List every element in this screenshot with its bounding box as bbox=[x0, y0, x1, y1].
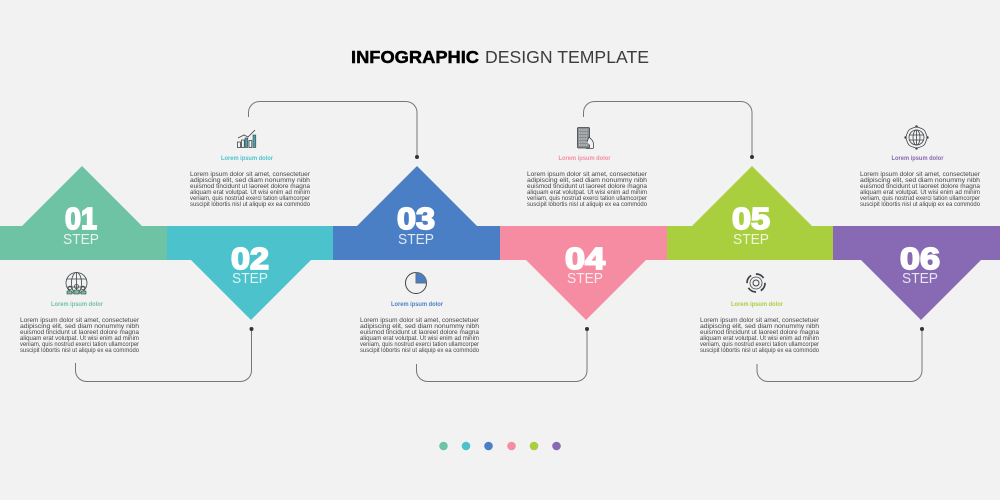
text block: step 5: adipiscing elit, sed diam nonummy nibh bbox=[700, 324, 819, 330]
panel: step 03 banner bbox=[333, 166, 500, 260]
connector: step 6 to text below step 5 bbox=[757, 327, 924, 382]
text block: step 6: suscipit lobortis nisl ut aliquip ex ea commodo bbox=[860, 202, 981, 208]
panel: step 04 banner bbox=[500, 226, 667, 320]
text block: step 6: veniam, quis nostrud exerci tation ullamcorper bbox=[860, 196, 980, 202]
title: DESIGN TEMPLATE bbox=[485, 47, 649, 67]
text block: step 1: Lorem ipsum dolor bbox=[51, 302, 104, 308]
text block: step 4: aliquam erat volutpat. Ut wisi enim ad minim bbox=[527, 190, 647, 196]
text block: step 2: Lorem ipsum dolor sit amet, consectetuer bbox=[190, 172, 310, 178]
text block: step 5: suscipit lobortis nisl ut aliquip ex ea commodo bbox=[700, 348, 820, 354]
panel: step 04 banner: 04 bbox=[565, 241, 606, 276]
text block: step 6: Lorem ipsum dolor bbox=[892, 156, 944, 162]
text block: step 5: aliquam erat volutpat. Ut wisi enim ad minim bbox=[700, 336, 819, 342]
panel: step 02 banner: 02 bbox=[231, 241, 269, 276]
text block: step 1: veniam, quis nostrud exerci tation ullamcorper bbox=[20, 342, 139, 348]
text block: step 6: adipiscing elit, sed diam nonummy nibh bbox=[860, 178, 980, 184]
text block: step 4 bbox=[527, 156, 648, 208]
icon: pie chart bbox=[406, 272, 426, 294]
panel: step 01 banner: STEP bbox=[63, 231, 99, 248]
text block: step 5 bbox=[700, 302, 820, 354]
text block: step 6: euismod tincidunt ut laoreet dolore magna bbox=[860, 184, 981, 190]
icon: global network bbox=[904, 125, 929, 150]
text block: step 2: adipiscing elit, sed diam nonummy nibh bbox=[190, 178, 310, 184]
text block: step 3: veniam, quis nostrud exerci tation ullamcorper bbox=[360, 342, 479, 348]
panel: step 06 banner: 06 bbox=[900, 241, 940, 276]
legend dots bbox=[439, 442, 561, 450]
panel: step 02 banner: STEP bbox=[232, 270, 268, 287]
text block: step 4: euismod tincidunt ut laoreet dolore magna bbox=[527, 184, 648, 190]
text block: step 1 bbox=[20, 302, 140, 354]
connector: step 3 to text above step 2 bbox=[248, 102, 419, 159]
title bbox=[351, 47, 649, 67]
text block: step 3 bbox=[360, 302, 480, 354]
panel: step 03 banner: STEP bbox=[398, 231, 434, 248]
connector: step 2 to text below step 1 bbox=[76, 327, 254, 382]
text block: step 4: Lorem ipsum dolor sit amet, consectetuer bbox=[527, 172, 647, 178]
text block: step 1: aliquam erat volutpat. Ut wisi enim ad minim bbox=[20, 336, 139, 342]
icon: gear with circular arrows bbox=[747, 274, 765, 292]
text block: step 5: veniam, quis nostrud exerci tation ullamcorper bbox=[700, 342, 819, 348]
text block: step 5: Lorem ipsum dolor bbox=[731, 302, 784, 308]
panel: step 05 banner: STEP bbox=[733, 231, 769, 248]
text block: step 4: adipiscing elit, sed diam nonummy nibh bbox=[527, 178, 647, 184]
panel: step 03 banner: 03 bbox=[397, 201, 435, 236]
panel: step 05 banner bbox=[667, 166, 833, 260]
text block: step 3: Lorem ipsum dolor sit amet, consectetuer bbox=[360, 318, 479, 324]
connector: step 5 to text above step 4 bbox=[584, 102, 754, 159]
text block: step 4: Lorem ipsum dolor bbox=[558, 156, 611, 162]
connector: step 4 to text below step 3 bbox=[416, 327, 589, 382]
text block: step 1: adipiscing elit, sed diam nonummy nibh bbox=[20, 324, 139, 330]
panel: step 06 banner: STEP bbox=[902, 270, 938, 287]
text block: step 1: Lorem ipsum dolor sit amet, consectetuer bbox=[20, 318, 139, 324]
panel: step 02 banner bbox=[167, 226, 333, 320]
panel: step 04 banner: STEP bbox=[567, 270, 603, 287]
title: INFOGRAPHIC bbox=[351, 47, 479, 67]
icon: globe with people bbox=[66, 272, 87, 294]
text block: step 1: euismod tincidunt ut laoreet dolore magna bbox=[20, 330, 140, 336]
text block: step 3: euismod tincidunt ut laoreet dolore magna bbox=[360, 330, 480, 336]
panel: step 05 banner: 05 bbox=[732, 201, 770, 236]
text block: step 1: suscipit lobortis nisl ut aliquip ex ea commodo bbox=[20, 348, 140, 354]
icon: rising bar chart bbox=[238, 130, 256, 148]
text block: step 2: veniam, quis nostrud exerci tation ullamcorper bbox=[190, 196, 310, 202]
text block: step 2: suscipit lobortis nisl ut aliquip ex ea commodo bbox=[190, 202, 311, 208]
text block: step 2 bbox=[190, 156, 311, 208]
text block: step 2: euismod tincidunt ut laoreet dolore magna bbox=[190, 184, 311, 190]
text block: step 4: veniam, quis nostrud exerci tation ullamcorper bbox=[527, 196, 647, 202]
text block: step 2: aliquam erat volutpat. Ut wisi enim ad minim bbox=[190, 190, 310, 196]
text block: step 6: Lorem ipsum dolor sit amet, consectetuer bbox=[860, 172, 980, 178]
text block: step 5: euismod tincidunt ut laoreet dolore magna bbox=[700, 330, 820, 336]
icon: calculator in hand bbox=[578, 128, 594, 148]
text block: step 5: Lorem ipsum dolor sit amet, consectetuer bbox=[700, 318, 819, 324]
text block: step 4: suscipit lobortis nisl ut aliquip ex ea commodo bbox=[527, 202, 648, 208]
text block: step 6: aliquam erat volutpat. Ut wisi enim ad minim bbox=[860, 190, 980, 196]
text block: step 3: Lorem ipsum dolor bbox=[391, 302, 444, 308]
text block: step 2: Lorem ipsum dolor bbox=[221, 156, 274, 162]
text block: step 3: aliquam erat volutpat. Ut wisi enim ad minim bbox=[360, 336, 479, 342]
text block: step 3: adipiscing elit, sed diam nonummy nibh bbox=[360, 324, 479, 330]
panel: step 01 banner bbox=[0, 166, 167, 260]
text block: step 3: suscipit lobortis nisl ut aliquip ex ea commodo bbox=[360, 348, 480, 354]
text block: step 6 bbox=[860, 156, 981, 208]
panel: step 01 banner: 01 bbox=[65, 201, 97, 236]
panel: step 06 banner bbox=[833, 226, 1000, 320]
